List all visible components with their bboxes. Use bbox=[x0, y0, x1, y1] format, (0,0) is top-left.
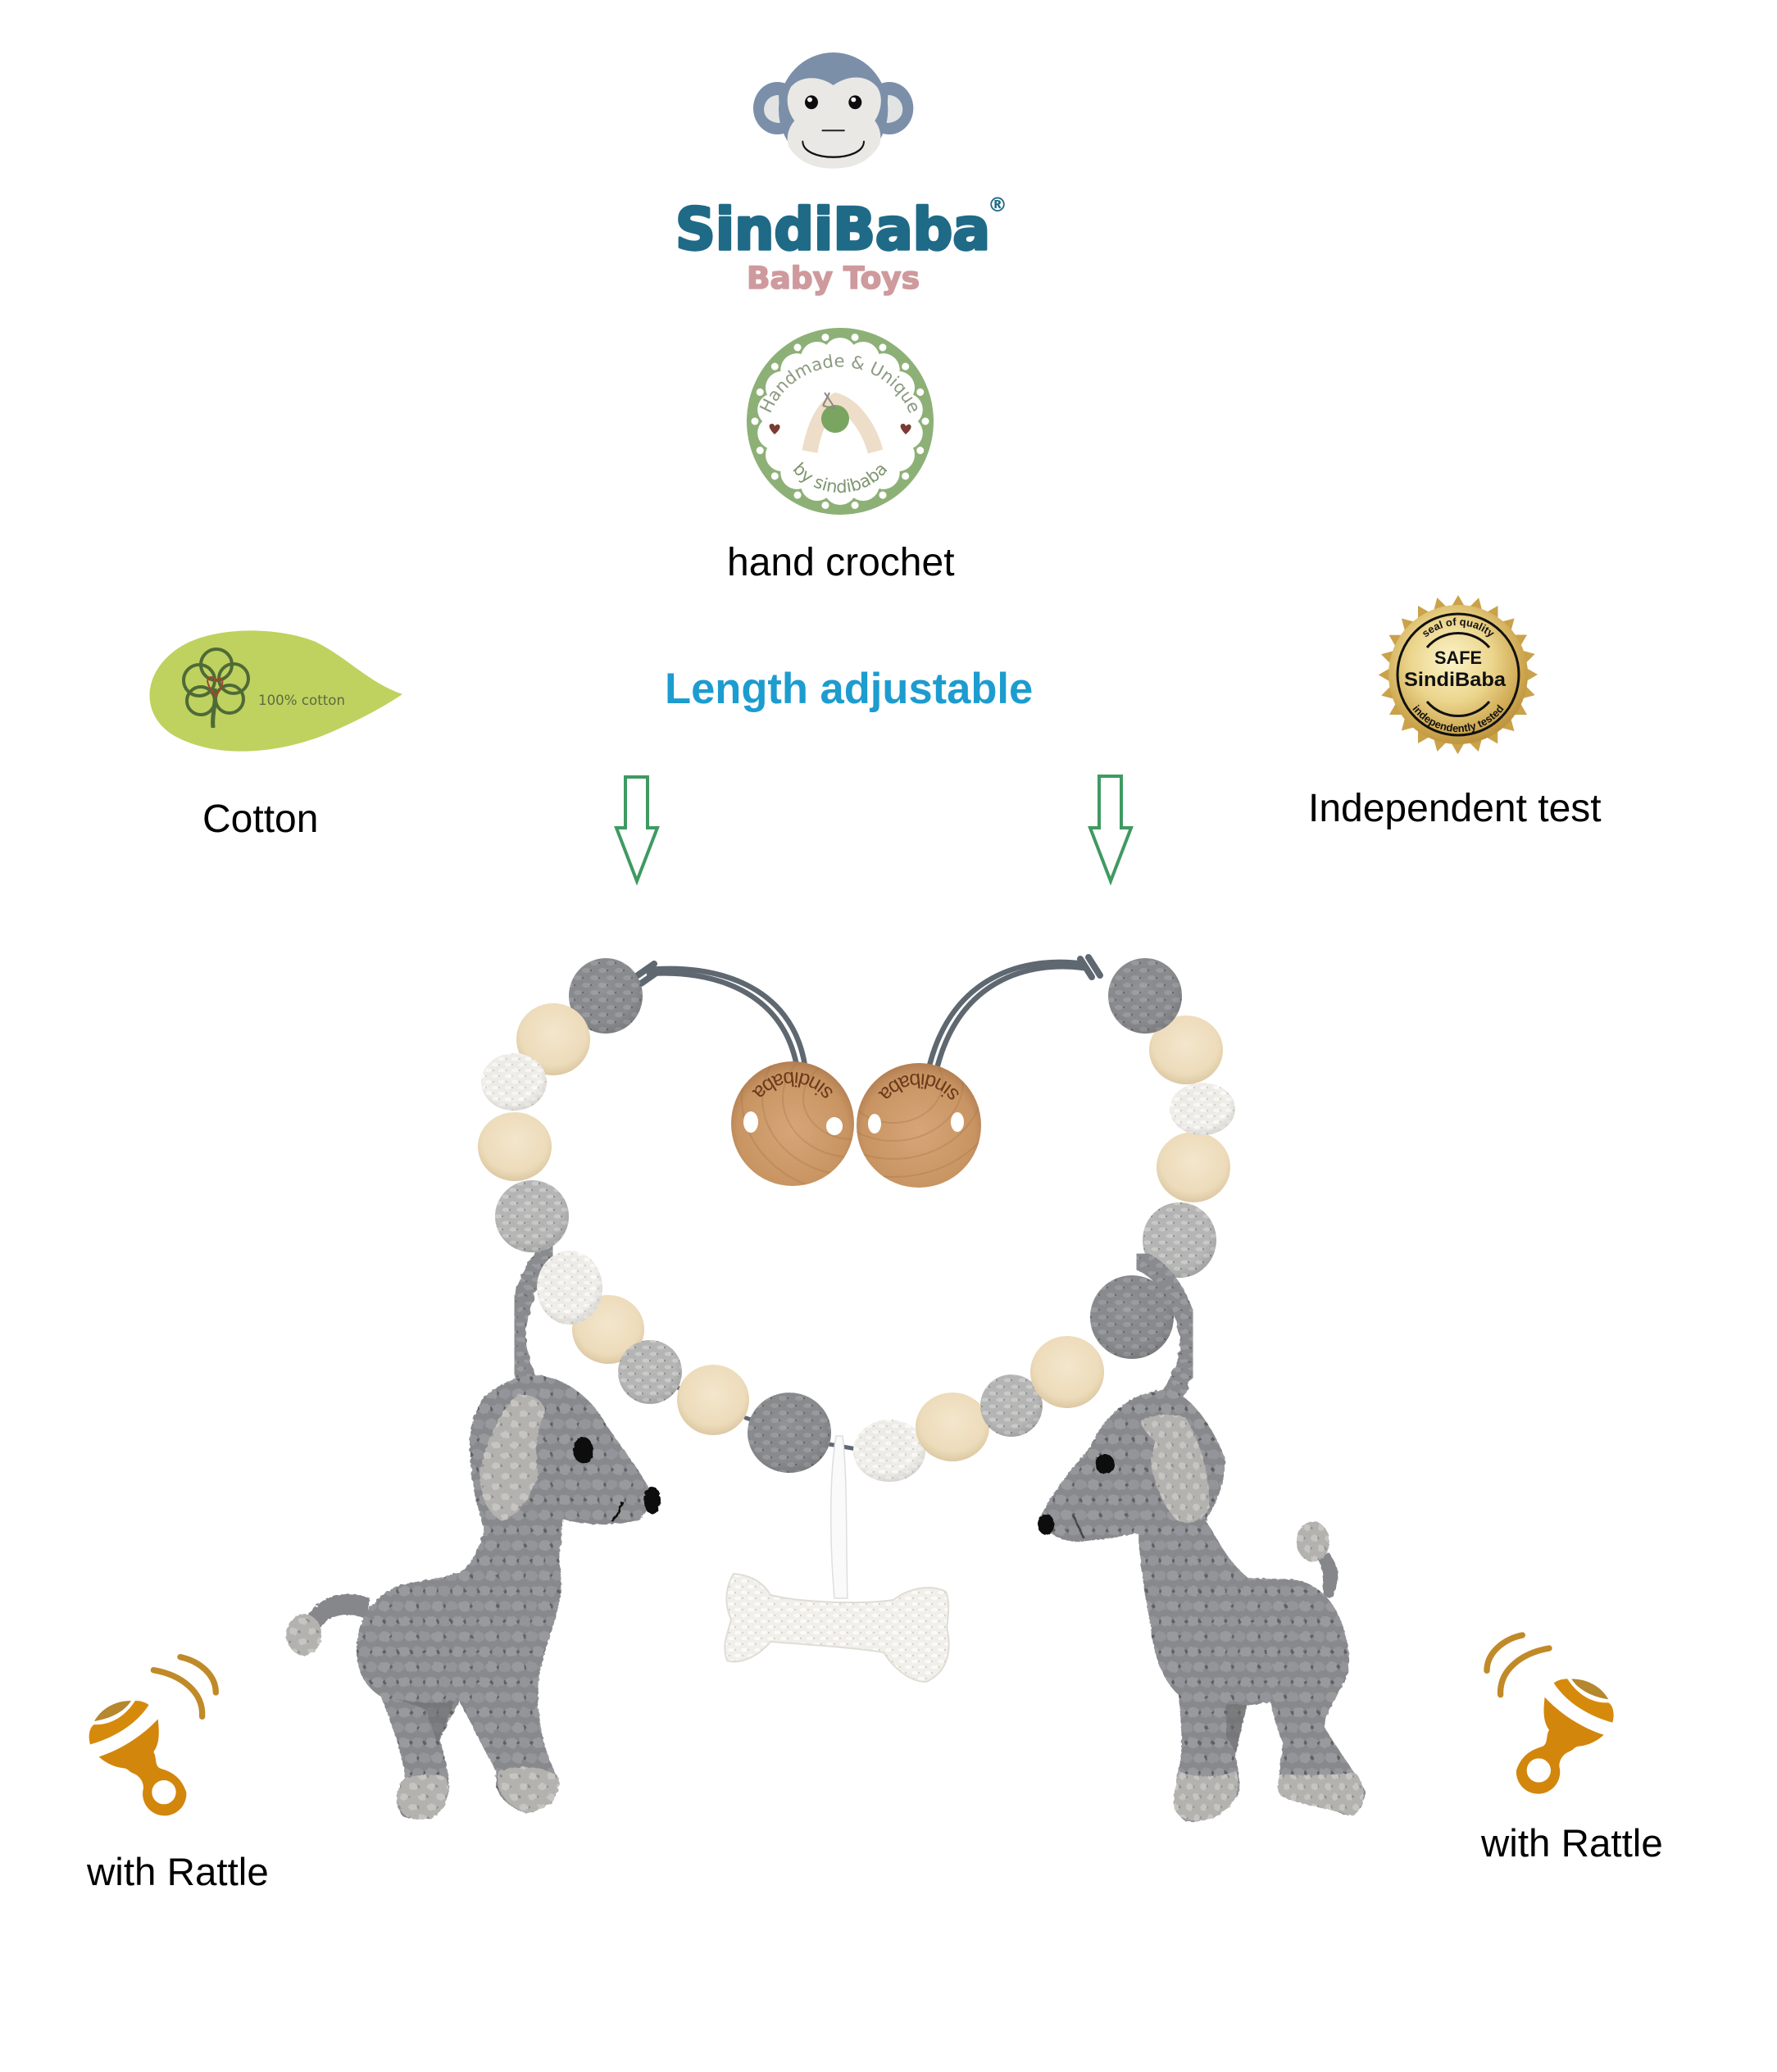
arrow: right bbox=[1090, 776, 1131, 881]
heading: length adjustable: Length adjustable bbox=[665, 665, 1033, 713]
icon: handmade badge bbox=[747, 328, 934, 515]
right dog hanging strap bbox=[1139, 1261, 1190, 1393]
icon: gold safety seal: SindiBaba bbox=[1404, 669, 1507, 691]
icon: rattle right bbox=[1487, 1635, 1614, 1794]
wooden clip: left: sindibaba bbox=[752, 1072, 833, 1098]
brand name: SindiBaba bbox=[675, 196, 990, 263]
crochet bead over left dog strap bbox=[537, 1251, 602, 1325]
bone hanging loop bbox=[831, 1436, 848, 1598]
cords to soother clips bbox=[638, 957, 1100, 1449]
label: with rattle left: with Rattle bbox=[86, 1851, 269, 1894]
icon: monkey logo bbox=[753, 52, 913, 169]
crochet bone bbox=[725, 1574, 949, 1682]
icon: gold safety seal: seal of quality bbox=[1423, 618, 1494, 638]
arrow: left bbox=[616, 777, 657, 881]
bead chain bbox=[478, 958, 1235, 1482]
label: cotton: Cotton bbox=[202, 797, 318, 841]
icon: gold safety seal bbox=[1379, 595, 1538, 754]
icon: rattle left bbox=[89, 1657, 216, 1815]
icon: handmade badge: by sindibaba bbox=[793, 461, 887, 493]
label: with rattle right: with Rattle bbox=[1480, 1822, 1663, 1865]
wooden clip: right bbox=[857, 1063, 981, 1188]
crochet dog: right bbox=[1038, 1388, 1366, 1822]
brand subtitle: Baby Toys bbox=[747, 261, 920, 296]
crochet dog: left bbox=[286, 1375, 661, 1820]
icon: cotton leaf bbox=[150, 630, 402, 752]
icon: gold safety seal: independently tested bbox=[1412, 705, 1504, 733]
label: hand crochet: hand crochet bbox=[727, 541, 955, 584]
wooden clip: left bbox=[731, 1061, 854, 1186]
icon: gold safety seal: SAFE bbox=[1434, 648, 1482, 668]
brand name: ® bbox=[988, 193, 1007, 216]
wooden clip: right: sindibaba bbox=[878, 1074, 959, 1100]
icon: handmade badge: Handmade & Unique bbox=[759, 354, 918, 413]
left dog hanging strap bbox=[516, 1250, 551, 1379]
label: independent test: Independent test bbox=[1308, 787, 1602, 830]
icon: cotton leaf: 100% cotton bbox=[258, 693, 345, 709]
